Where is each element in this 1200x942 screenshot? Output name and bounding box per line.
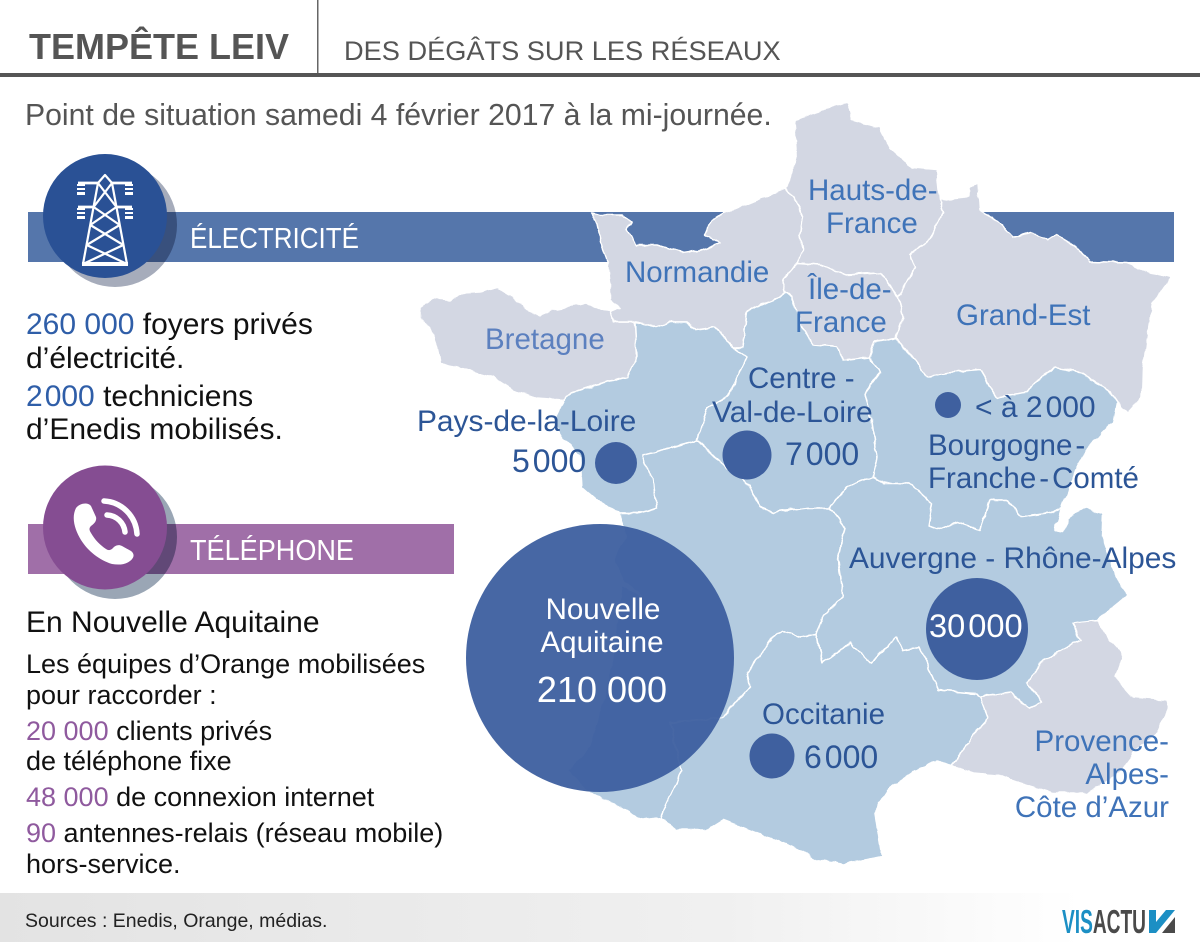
data: Auvergne-Rhône-Alpes: Auvergne - Rhône-Alpes — [849, 542, 1176, 575]
region: Centre-Val-de-Loire — [697, 292, 880, 512]
subtitle: DES DÉGÂTS SUR LES RÉSEAUX — [344, 35, 781, 66]
data: Centre-Val-de-Loire: Centre - — [748, 362, 855, 395]
data: Bourgogne-Franche-Comté: Bourgogne- — [928, 429, 1085, 462]
data: Auvergne-Rhône-Alpes: 30000 — [929, 607, 1023, 644]
region: Pays-de-la-Loire — [553, 322, 747, 513]
electricity band — [28, 212, 1174, 262]
telephone band — [28, 524, 454, 574]
data: Occitanie: Occitanie — [762, 698, 885, 731]
title: TEMPÊTE LEIV — [29, 25, 289, 67]
footer — [0, 893, 1200, 942]
telephone band label: TÉLÉPHONE — [190, 534, 354, 567]
region: Hauts-de-France — [785, 102, 943, 297]
data: Centre-Val-de-Loire — [712, 362, 873, 480]
telephone text block — [26, 606, 443, 879]
data: Nouvelle-Aquitaine bubble — [466, 524, 734, 792]
region: Nouvelle-Aquitaine — [568, 440, 845, 820]
data: Occitanie: 6000 — [804, 739, 878, 775]
telephone text block: En Nouvelle Aquitaine — [26, 606, 320, 639]
icon: pylon — [43, 154, 177, 287]
telephone text block: 90 antennes-relais (réseau mobile) — [26, 818, 443, 848]
telephone text block: pour raccorder : — [26, 680, 217, 710]
label: Bretagne: Bretagne — [485, 323, 605, 356]
data: Bourgogne-Franche-Comté: < à 2000 — [975, 391, 1096, 424]
data: Pays-de-la-Loire — [417, 405, 637, 484]
telephone text block: 48 000 de connexion internet — [26, 782, 375, 812]
label: Provence-Alpes-Côte d'Azur: Côte d’Azur — [1015, 791, 1169, 824]
label: Hauts-de-France: France — [826, 207, 918, 240]
electricity text block — [26, 308, 313, 446]
label: Île-de-France: France — [795, 306, 887, 339]
electricity text block: 2000 techniciens — [26, 380, 253, 413]
data: Nouvelle-Aquitaine bubble: 210 000 — [537, 669, 667, 710]
region: Île-de-France — [783, 263, 903, 360]
region: Provence-Alpes-Côte d'Azur — [952, 620, 1169, 793]
data: Nouvelle-Aquitaine bubble: Nouvelle — [546, 593, 660, 626]
data: Occitanie — [750, 698, 885, 778]
label: Île-de-France: Île-de- — [808, 273, 892, 306]
data: Centre-Val-de-Loire: 7000 — [785, 436, 859, 472]
region: Bourgogne-Franche-Comté — [865, 338, 1117, 530]
telephone text block: de téléphone fixe — [26, 746, 232, 776]
region: Grand-Est — [895, 183, 1172, 413]
label: Provence-Alpes-Côte d'Azur: Alpes- — [1085, 758, 1169, 791]
data: Auvergne-Rhône-Alpes — [849, 542, 1176, 680]
electricity text block: 260 000 foyers privés — [26, 308, 313, 341]
region: Occitanie — [660, 630, 988, 865]
telephone text block: 20 000 clients privés — [26, 716, 272, 746]
label: Provence-Alpes-Côte d'Azur: Provence- — [1035, 725, 1169, 758]
telephone text block: Les équipes d’Orange mobilisées — [26, 649, 425, 679]
electricity text block: d’Enedis mobilisés. — [26, 413, 283, 446]
label: Normandie: Normandie — [625, 256, 769, 289]
map of France — [420, 102, 1172, 865]
data: Nouvelle-Aquitaine bubble: Aquitaine — [540, 626, 664, 659]
label: Hauts-de-France: Hauts-de- — [808, 174, 938, 207]
data: Centre-Val-de-Loire: Val-de-Loire — [712, 396, 873, 429]
data: Pays-de-la-Loire: 5000 — [512, 443, 586, 479]
date line: Point de situation samedi 4 février 2017 à la mi-journée. — [25, 99, 772, 132]
icon: telephone — [43, 466, 177, 599]
data: Pays-de-la-Loire: Pays-de-la-Loire — [417, 405, 636, 438]
electricity text block: d’électricité. — [26, 342, 184, 375]
data: Bourgogne-Franche-Comté: Franche-Comté — [928, 462, 1139, 495]
electricity band label: ÉLECTRICITÉ — [190, 222, 359, 255]
region: Bretagne — [420, 287, 637, 400]
header — [0, 0, 1200, 77]
data: Bourgogne-Franche-Comté — [928, 391, 1139, 495]
region: Auvergne-Rhône-Alpes — [817, 477, 1128, 708]
sources: Sources : Enedis, Orange, médias. — [25, 910, 327, 932]
telephone text block: hors-service. — [26, 849, 181, 879]
label: Grand-Est: Grand-Est — [956, 299, 1090, 332]
region: Normandie — [592, 188, 803, 347]
logo: VISACTU — [1062, 903, 1146, 940]
